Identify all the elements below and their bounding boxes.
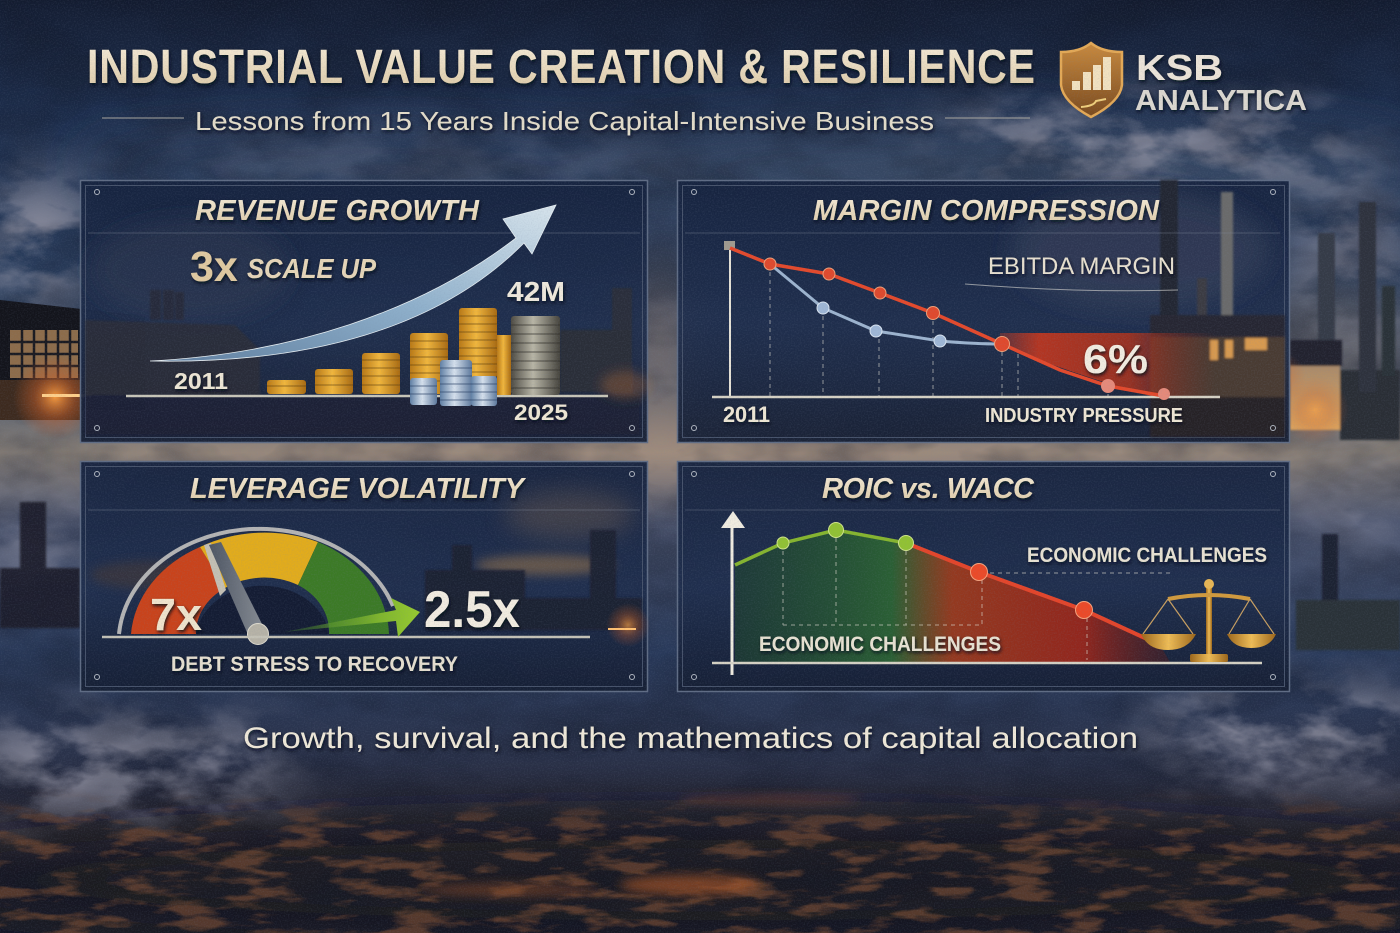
- label: debt stress: DEBT STRESS TO RECOVERY: [171, 653, 458, 676]
- drop lines: [770, 264, 1108, 397]
- gauge needle: [204, 542, 268, 644]
- area: [735, 530, 1170, 662]
- footer tagline: Growth, survival, and the mathematics of capital allocation: [243, 722, 1138, 755]
- axis: [102, 636, 590, 638]
- panel corner rivets: [94, 190, 1276, 680]
- panel scenery: [90, 491, 650, 647]
- panel: revenue growth: [80, 180, 649, 442]
- coin stacks: [267, 308, 560, 406]
- panel: ROIC vs WACC: [678, 462, 1290, 692]
- label: 7x: 7x: [150, 589, 202, 640]
- logo: KSB Analytica: KSB: [1136, 47, 1223, 88]
- line: blue: [730, 248, 1002, 344]
- panel: leverage volatility: [80, 462, 650, 692]
- axes: [712, 511, 1262, 675]
- title: INDUSTRIAL VALUE CREATION & RESILIENCE: [87, 41, 1035, 94]
- heading: ROIC vs. WACC: [822, 473, 1035, 505]
- label: 2011: 2011: [174, 368, 228, 394]
- panel scenery: [1010, 180, 1285, 437]
- icon: shield: [1061, 43, 1122, 117]
- label: 6%: 6%: [1083, 336, 1148, 382]
- label: 2.5x: 2.5x: [424, 581, 520, 639]
- label: 2011: 2011: [723, 402, 770, 427]
- arrow: growth: [150, 205, 556, 361]
- label: 2025: 2025: [514, 400, 568, 425]
- red area: [1000, 333, 1215, 396]
- label: 42M: 42M: [507, 276, 565, 307]
- icon: balance scale: [1141, 579, 1276, 662]
- panel: margin compression: [678, 180, 1290, 442]
- right refinery: [1290, 202, 1400, 650]
- label: industry pressure: INDUSTRY PRESSURE: [985, 405, 1183, 427]
- callout: 3x scale up: 3x: [190, 243, 238, 291]
- callout: 3x scale up: SCALE UP: [247, 253, 376, 284]
- logo: KSB Analytica: [1061, 43, 1307, 117]
- label: EBITDA margin: EBITDA MARGIN: [988, 253, 1175, 280]
- arrow: green: [284, 598, 420, 637]
- logo: KSB Analytica: ANALYTICA: [1135, 85, 1307, 117]
- left factory: [0, 300, 145, 439]
- heading: LEVERAGE VOLATILITY: [190, 473, 527, 505]
- subtitle: Lessons from 15 Years Inside Capital-Intensive Business: [195, 106, 934, 136]
- heading: REVENUE GROWTH: [195, 195, 480, 227]
- label: economic challenges upper: ECONOMIC CHALLENGES: [1027, 544, 1267, 567]
- left lower refinery: [0, 502, 80, 628]
- line: ROIC: [735, 530, 906, 565]
- panel scenery: [85, 220, 649, 435]
- chart axes: [712, 241, 1220, 397]
- axis: [126, 395, 608, 397]
- heading: MARGIN COMPRESSION: [813, 195, 1160, 227]
- gauge: [119, 529, 393, 644]
- line: EBITDA margin: [730, 248, 1164, 396]
- callout: 3x scale up: [190, 243, 376, 291]
- label: economic challenges lower: ECONOMIC CHALLENGES: [759, 633, 1001, 656]
- dashed guides: [783, 530, 1170, 660]
